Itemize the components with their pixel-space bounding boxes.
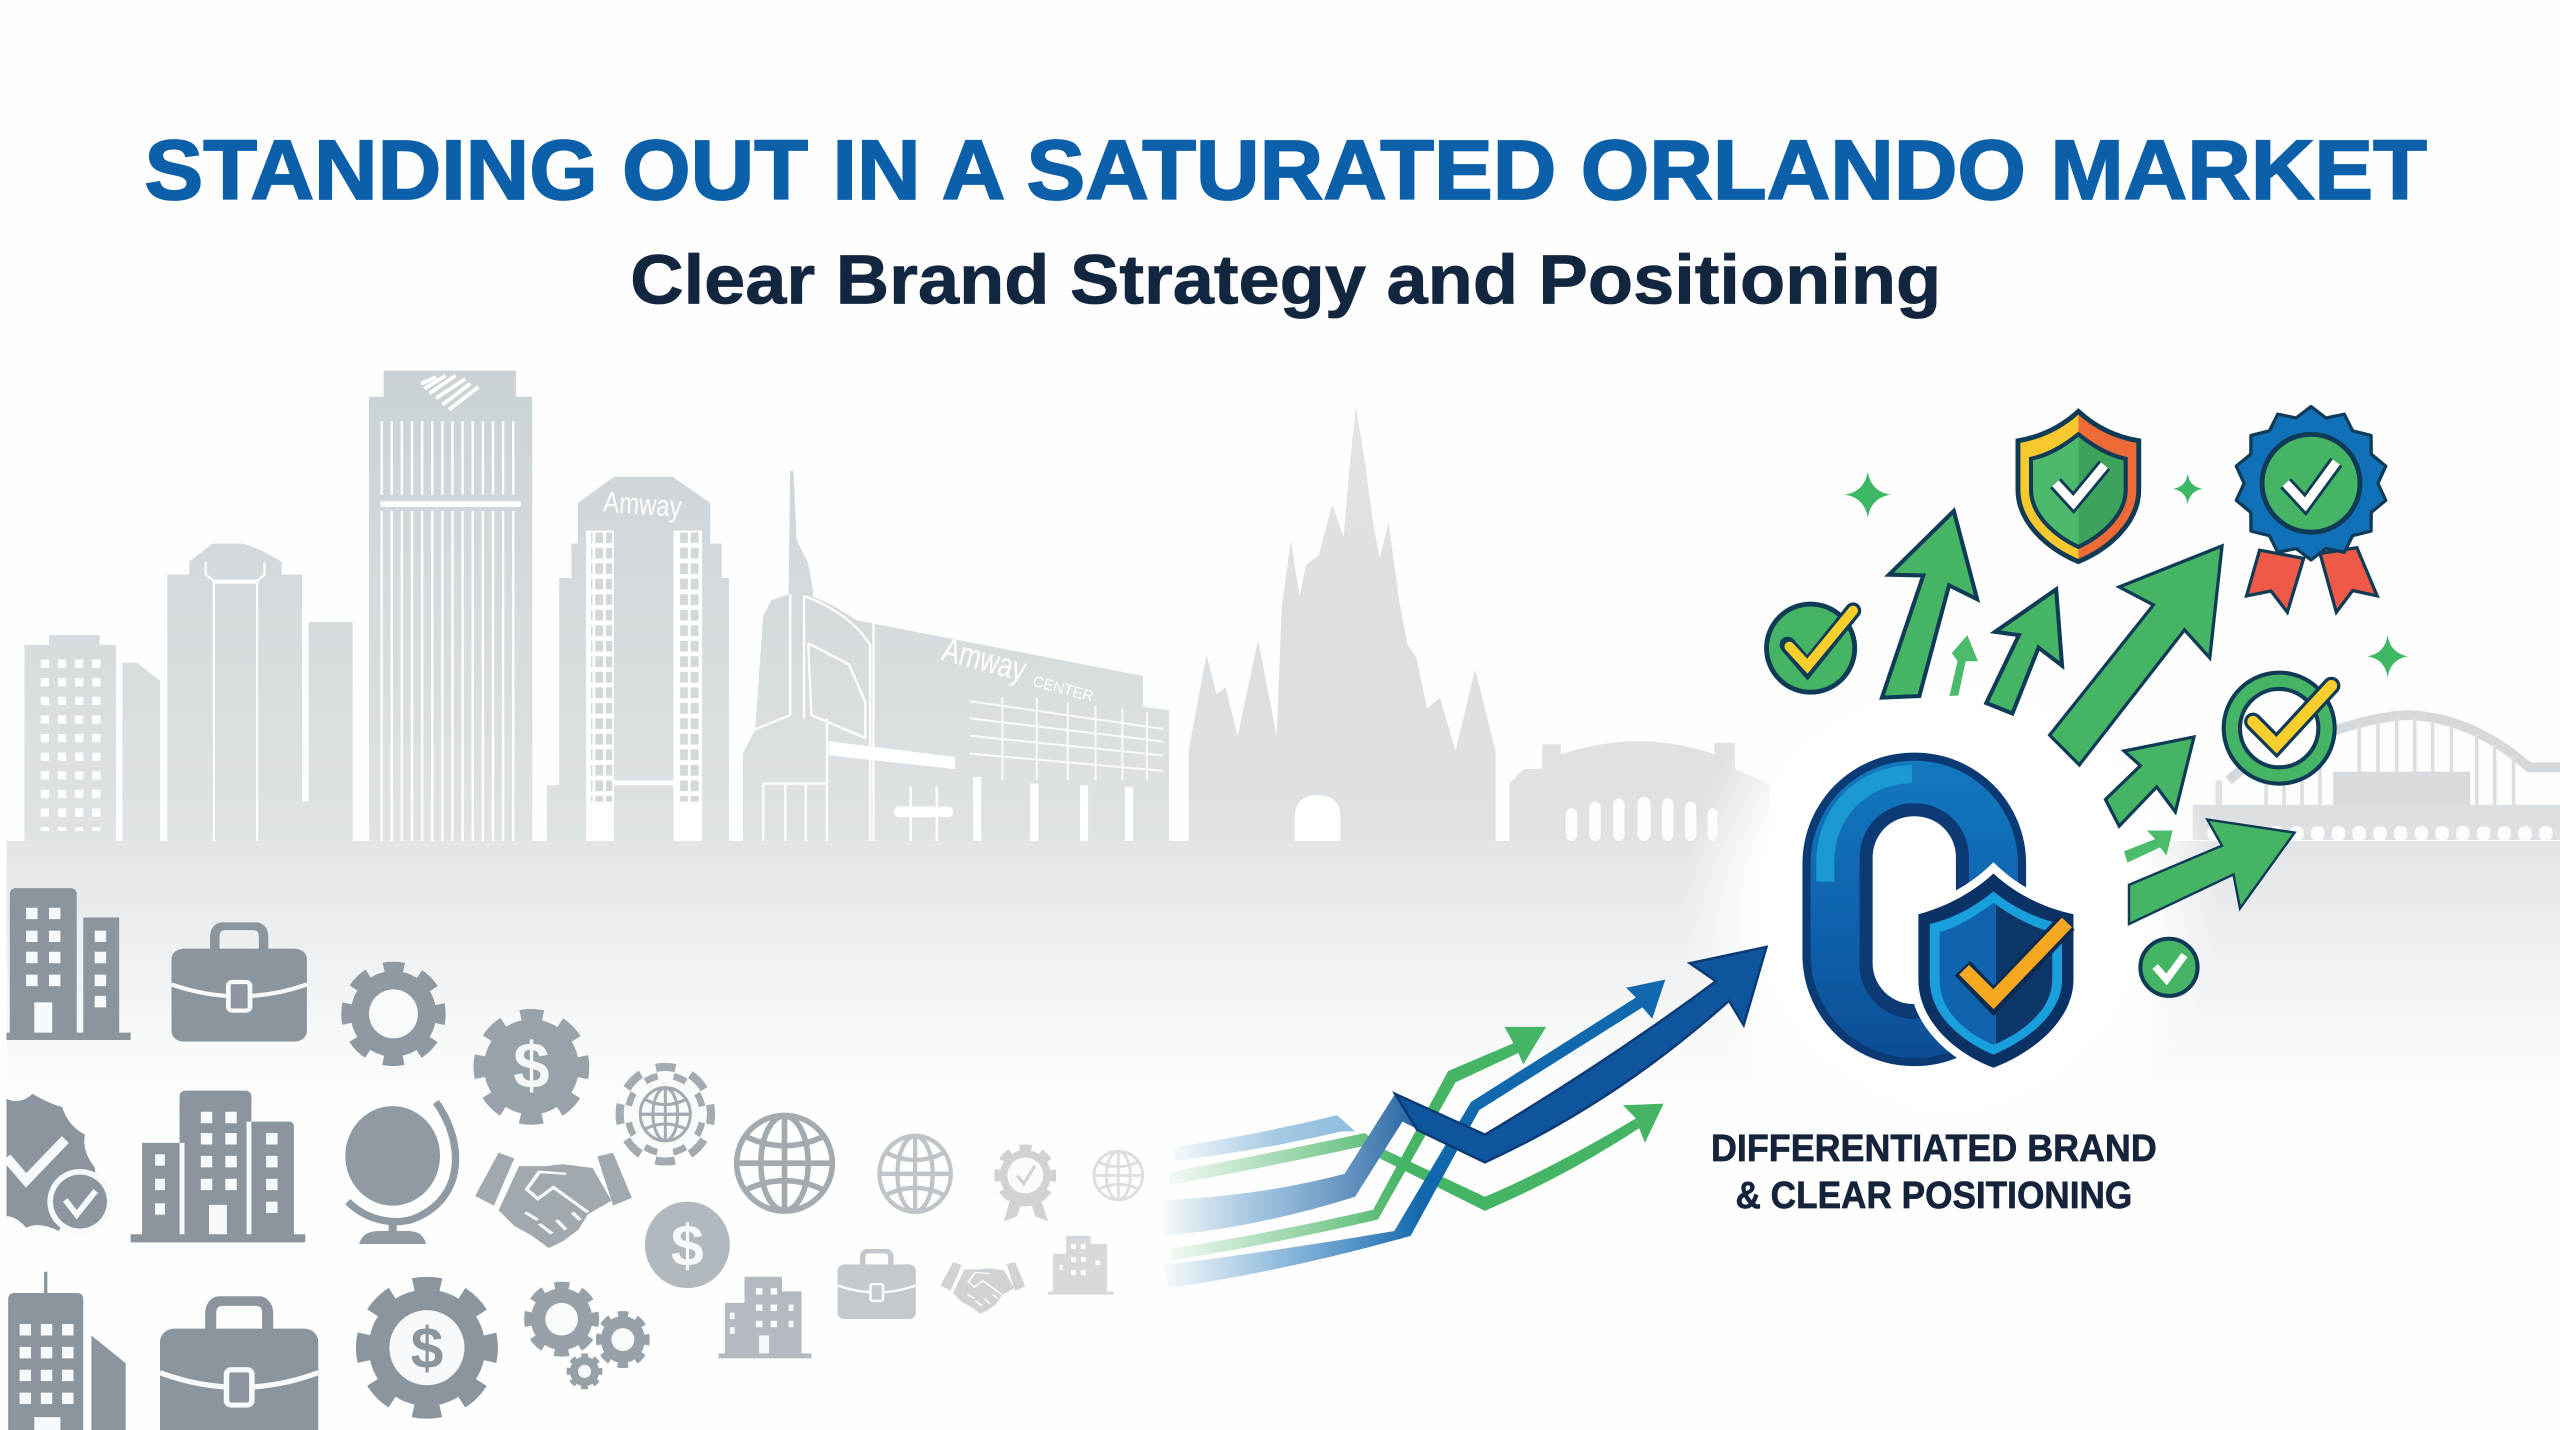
icon: globe, faintest bbox=[1094, 1151, 1143, 1200]
icon: desk globe bbox=[345, 1102, 456, 1244]
icon: globe gear outline bbox=[621, 1069, 709, 1160]
arena: Amway Center bbox=[743, 471, 1169, 841]
letter O bbox=[1802, 753, 2026, 1066]
arrow: wide green bbox=[2129, 820, 2295, 924]
icon: gear bbox=[347, 968, 439, 1060]
icon: three gears bbox=[529, 1286, 647, 1387]
arrow: small green bbox=[2124, 831, 2173, 863]
icon: tower logo bbox=[421, 375, 478, 410]
icon: dollar coin: $ bbox=[671, 1213, 704, 1278]
success burst bbox=[1767, 407, 2408, 996]
shield bbox=[1918, 873, 2073, 1068]
arrow: main dark blue bbox=[1162, 947, 1767, 1236]
icon: small briefcase bbox=[838, 1251, 916, 1319]
arrow: tiny green bbox=[1949, 635, 1978, 696]
icon: rainbow shield bbox=[2018, 411, 2139, 562]
brand caption bbox=[1711, 1127, 2157, 1216]
Orlando skyline bbox=[24, 371, 2560, 841]
icon: ringed check bbox=[2224, 673, 2335, 784]
brand caption: DIFFERENTIATED BRAND bbox=[1711, 1127, 2157, 1169]
icon: briefcase bbox=[171, 926, 307, 1042]
icon: large briefcase bbox=[160, 1301, 318, 1430]
converging growth arrows bbox=[1162, 947, 1767, 1288]
subtitle: Clear Brand Strategy and Positioning bbox=[630, 241, 1941, 319]
brand mark: letter O with shield bbox=[1802, 753, 2073, 1068]
sign: Amway Center: Amway bbox=[938, 631, 1031, 689]
icon: globe, lighter bbox=[879, 1136, 951, 1212]
icon: award badge bbox=[998, 1148, 1053, 1221]
icon: sparkle left bbox=[1845, 472, 1891, 518]
bridge silhouette bbox=[2193, 715, 2560, 840]
business icons field bbox=[7, 888, 1143, 1430]
icon: handshake bbox=[475, 1153, 632, 1248]
building: tall striped tower with logo bbox=[369, 371, 532, 841]
sign: Amway Center: CENTER bbox=[1031, 673, 1095, 706]
arrow: faded light blue bbox=[1172, 1115, 1355, 1161]
icon: small check circle bbox=[2140, 939, 2198, 996]
brand caption: & CLEAR POSITIONING bbox=[1736, 1174, 2132, 1216]
arrow: tall green bbox=[1882, 511, 1977, 698]
arrow: medium green bbox=[1986, 589, 2062, 713]
building: Amway tower bbox=[547, 477, 729, 841]
white glow behind logo bbox=[1682, 637, 2220, 1175]
arrow: lower green bbox=[1169, 1104, 1664, 1211]
icon: office complex bbox=[131, 1091, 305, 1242]
icon: office building bbox=[7, 888, 131, 1040]
icon: dollar coin bbox=[645, 1202, 730, 1288]
arrow: large green bbox=[2050, 546, 2222, 765]
icon: small office bbox=[718, 1277, 811, 1358]
arrow: upper green bbox=[1169, 1027, 1546, 1260]
sign: Amway Center bbox=[938, 631, 1095, 706]
icon: sparkle right bbox=[2367, 635, 2408, 678]
icon: small handshake bbox=[940, 1262, 1025, 1314]
icon: amber check bbox=[1962, 922, 2067, 1001]
sign: Amway: Amway bbox=[602, 486, 683, 524]
icon: verified badge bbox=[7, 1094, 113, 1234]
building: short office block bbox=[24, 635, 160, 841]
title: STANDING OUT IN A SATURATED ORLANDO MARKET bbox=[144, 122, 2427, 217]
castle silhouette bbox=[1189, 407, 1496, 841]
building: domed crown tower bbox=[167, 544, 353, 841]
domed stadium silhouette bbox=[1510, 741, 1770, 841]
icon: tower with antenna bbox=[8, 1272, 126, 1430]
icon: green check circle bbox=[1767, 604, 1855, 692]
icon: dollar gear: $ bbox=[513, 1028, 550, 1101]
icon: sparkle middle bbox=[2173, 473, 2202, 504]
icon: large dollar gear bbox=[364, 1285, 489, 1410]
arrow: lower green bbox=[2105, 737, 2194, 826]
icon: dollar gear bbox=[480, 1016, 582, 1118]
ground haze band bbox=[7, 841, 2560, 1126]
icon: large dollar gear: $ bbox=[411, 1316, 443, 1381]
icon: globe bbox=[736, 1115, 833, 1211]
icon: award rosette bbox=[2236, 407, 2386, 612]
icon: faint office bbox=[1048, 1236, 1113, 1295]
arrow: slim blue bbox=[1162, 980, 1665, 1288]
